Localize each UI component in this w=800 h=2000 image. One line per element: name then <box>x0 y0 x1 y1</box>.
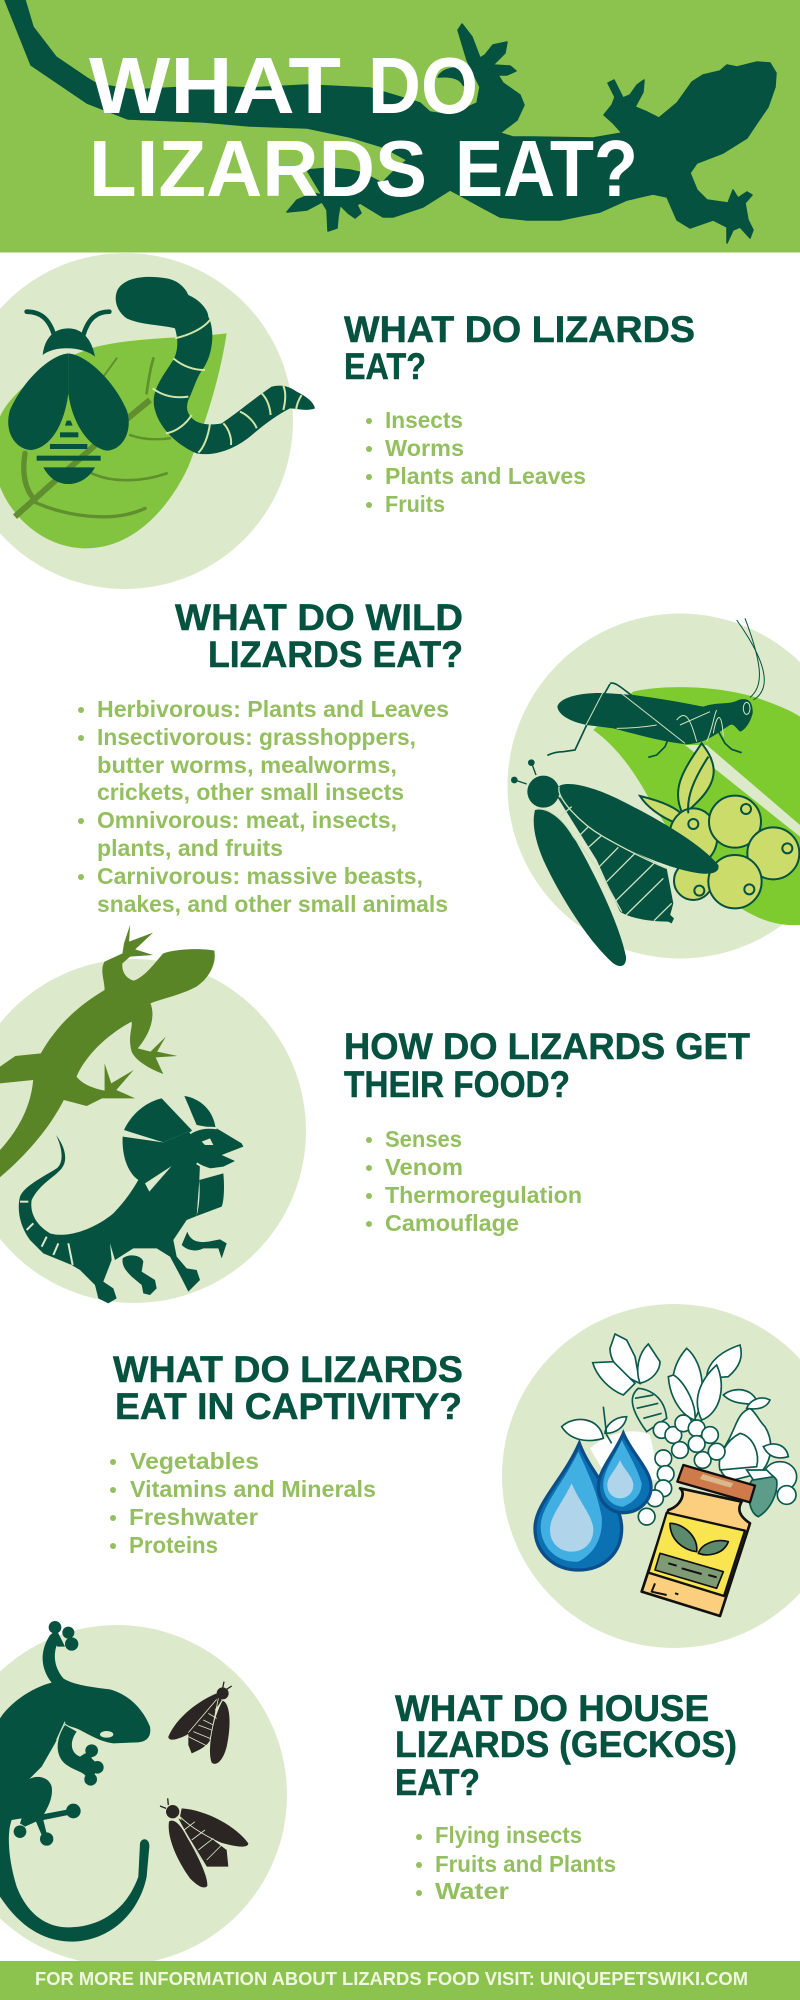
list: Vitamins and Minerals <box>130 1476 376 1502</box>
list: Camouflage <box>385 1210 519 1236</box>
heading: HOW DO LIZARDS GET <box>344 1026 750 1067</box>
icon: supplement jar <box>642 1465 755 1616</box>
heading: THEIR FOOD? <box>344 1064 570 1105</box>
list: Carnivorous: massive beasts, <box>97 863 423 889</box>
icon: gecko silhouette <box>5 0 776 243</box>
background circle <box>0 1625 287 1965</box>
panel: house geckos <box>0 1621 737 1965</box>
heading: EAT? <box>395 1762 480 1803</box>
footer text: FOR MORE INFORMATION ABOUT LIZARDS FOOD VISIT: UNIQUEPETSWIKI.COM <box>35 1969 748 1989</box>
icon: gecko <box>0 1621 150 1942</box>
list <box>110 1448 376 1558</box>
heading: EAT IN CAPTIVITY? <box>115 1386 462 1427</box>
title: WHAT <box>89 41 341 130</box>
list <box>416 1822 616 1904</box>
list: plants, and fruits <box>97 835 283 861</box>
list: Vegetables <box>130 1448 259 1474</box>
list: Insectivorous: grasshoppers, <box>97 724 416 750</box>
heading: WHAT DO LIZARDS <box>113 1349 463 1390</box>
heading <box>344 1026 750 1105</box>
heading: WHAT DO WILD <box>175 597 463 638</box>
panel: captivity <box>110 1304 800 1648</box>
heading <box>344 309 695 387</box>
icon: leaf, insect and worm <box>0 277 315 548</box>
list: Thermoregulation <box>385 1182 582 1208</box>
title <box>89 41 638 213</box>
panel: wild lizards <box>78 597 800 966</box>
icon: water drops <box>535 1433 651 1570</box>
list: Plants and Leaves <box>385 463 586 489</box>
background circle <box>0 959 306 1303</box>
list <box>366 407 586 517</box>
background circle <box>0 253 293 589</box>
list <box>78 696 449 917</box>
background circle <box>508 614 800 958</box>
list: Fruits and Plants <box>435 1851 616 1877</box>
heading <box>395 1688 737 1803</box>
list: crickets, other small insects <box>97 779 404 805</box>
list: Omnivorous: meat, insects, <box>97 807 397 833</box>
panel: what do lizards eat <box>0 253 695 589</box>
list: snakes, and other small animals <box>97 891 448 917</box>
list <box>366 1126 582 1236</box>
list: Proteins <box>129 1532 218 1558</box>
list: Senses <box>385 1126 462 1152</box>
list: Worms <box>385 435 464 461</box>
list: Flying insects <box>435 1822 582 1848</box>
icon: green lizard <box>0 925 215 1177</box>
heading: LIZARDS EAT? <box>208 634 463 675</box>
heading: LIZARDS (GECKOS) <box>395 1724 737 1765</box>
icon: fruits and vegetables outline <box>562 1334 797 1525</box>
title: LIZARDS <box>89 124 427 213</box>
footer bar <box>0 1961 800 2000</box>
header banner <box>0 0 800 252</box>
icon: frilled lizard <box>19 1096 243 1303</box>
list: Venom <box>385 1154 463 1180</box>
background circle <box>502 1304 800 1648</box>
icon: grasshopper, moth and berries <box>511 618 800 966</box>
title: DO <box>368 41 478 130</box>
list: Water <box>435 1878 509 1904</box>
list: Fruits <box>385 491 445 517</box>
title: EAT? <box>455 124 638 213</box>
list: Herbivorous: Plants and Leaves <box>97 696 449 722</box>
heading: WHAT DO HOUSE <box>395 1688 709 1729</box>
heading <box>175 597 463 675</box>
list: butter worms, mealworms, <box>97 752 397 778</box>
icon: flying insects <box>160 1682 248 1887</box>
list: Insects <box>385 407 463 433</box>
heading <box>113 1349 463 1427</box>
heading: WHAT DO LIZARDS <box>344 309 695 350</box>
list: Freshwater <box>129 1504 258 1530</box>
heading: EAT? <box>344 346 426 387</box>
panel: how lizards get food <box>0 925 750 1303</box>
